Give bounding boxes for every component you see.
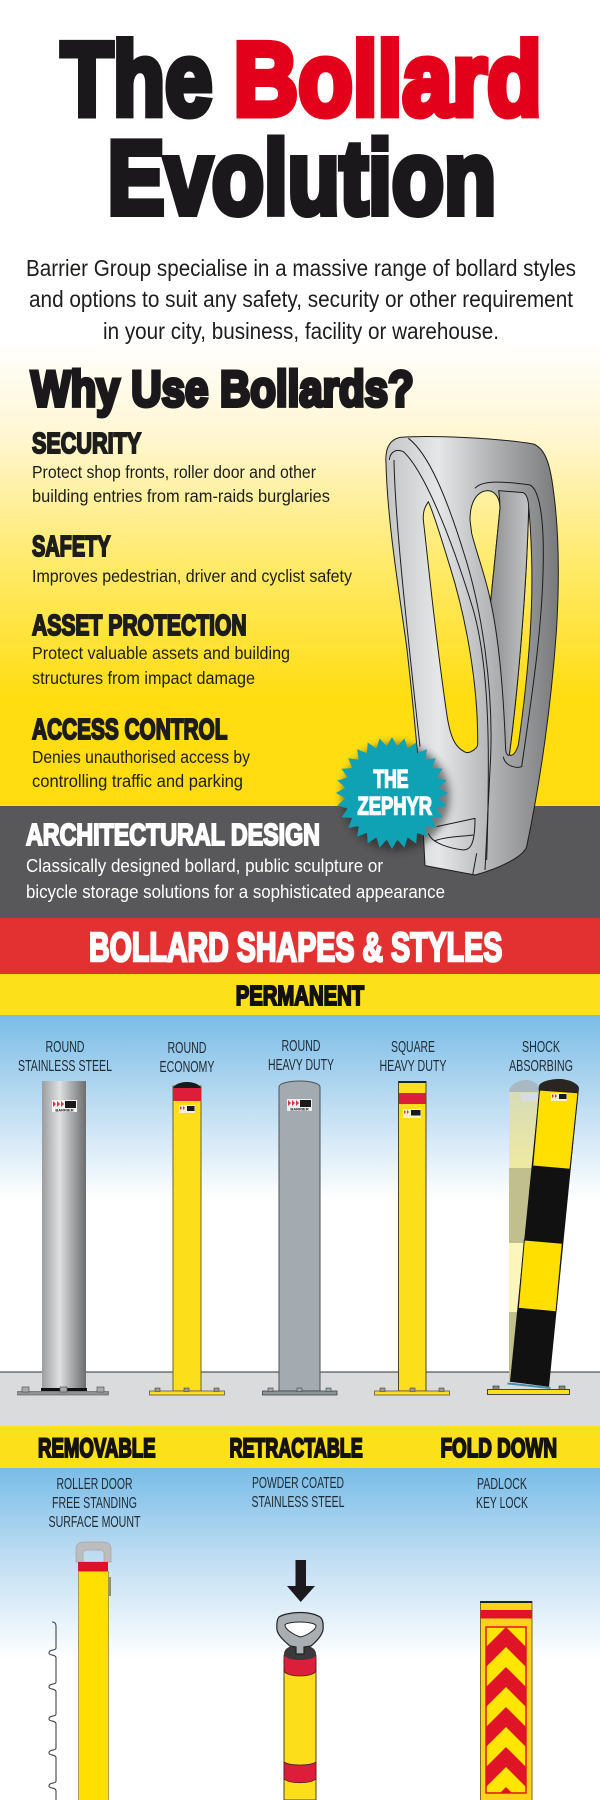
reason: security: SECURITY (32, 428, 141, 460)
labels: permanent types: STAINLESS STEEL (18, 1058, 112, 1075)
bollard: round heavy duty (262, 1081, 337, 1395)
band: permanent heading: PERMANENT (236, 981, 364, 1012)
labels: lower bollard options: ROLLER DOOR (56, 1476, 132, 1493)
reason: security: building entries from ram-raids burglaries (32, 486, 330, 506)
reason: security: Protect shop fronts, roller door and other (32, 462, 316, 482)
bollard: fold down with chevrons (480, 1601, 532, 1800)
background: white to yellow gradient (0, 0, 600, 806)
badge: the zephyr starburst: THE (374, 764, 408, 793)
bollard: round economy (150, 1082, 224, 1395)
reason: safety (32, 530, 352, 586)
intro text (26, 255, 576, 344)
bollard: shock absorbing, tilted with ghost upright position (488, 1079, 579, 1394)
panel: architectural design band (0, 806, 600, 918)
bollard: round stainless steel (18, 1081, 108, 1395)
bollard: retractable with key handle (277, 1612, 323, 1800)
bollard: square heavy duty (374, 1081, 450, 1395)
reason: access control (32, 714, 250, 791)
reason: access control: Denies unauthorised access by (32, 747, 250, 767)
band: permanent heading (0, 974, 600, 1015)
labels: permanent types (18, 1038, 573, 1076)
bollard: round stainless steel: BARRIER (55, 1108, 74, 1112)
band: removable, retractable, fold down headings (0, 1426, 600, 1468)
labels: permanent types: HEAVY DUTY (380, 1058, 446, 1075)
labels: lower bollard options: PADLOCK (477, 1476, 527, 1493)
intro text: in your city, business, facility or warehouse. (103, 318, 499, 344)
labels: lower bollard options: KEY LOCK (476, 1495, 528, 1512)
band: removable, retractable, fold down headings: RETRACTABLE (230, 1432, 363, 1463)
reason: asset protection: Protect valuable assets and building (32, 643, 290, 663)
labels: lower bollard options: FREE STANDING (52, 1495, 137, 1512)
labels: lower bollard options: SURFACE MOUNT (48, 1514, 141, 1531)
bollard: round heavy duty: BARRIER (290, 1106, 309, 1112)
labels: permanent types: ROUND (46, 1039, 84, 1056)
reason: safety: SAFETY (32, 530, 111, 563)
title: The (61, 22, 212, 138)
reason: asset protection: structures from impact damage (32, 668, 255, 688)
reason: asset protection (32, 610, 290, 688)
heading: why use bollards: Why Use Bollards? (31, 361, 414, 417)
arrow: retract downwards (287, 1560, 315, 1602)
architectural design text (26, 817, 445, 902)
reason: safety: Improves pedestrian, driver and cyclist safety (32, 566, 352, 586)
banner: bollard shapes and styles: BOLLARD SHAPES & STYLES (89, 925, 502, 970)
illustration: the zephyr sculptural bollard (386, 437, 558, 875)
band: removable, retractable, fold down headings: REMOVABLE (38, 1433, 156, 1463)
badge: the zephyr starburst: ZEPHYR (358, 792, 432, 820)
architectural design text: bicycle storage solutions for a sophisticated appearance (26, 881, 445, 902)
reason: access control: controlling traffic and parking (32, 771, 243, 791)
labels: lower bollard options: STAINLESS STEEL (252, 1494, 345, 1511)
architectural design text: ARCHITECTURAL DESIGN (26, 817, 320, 852)
title: Evolution (108, 121, 496, 236)
labels: lower bollard options (48, 1475, 528, 1531)
labels: permanent types: ABSORBING (509, 1058, 573, 1075)
band: removable, retractable, fold down headings: FOLD DOWN (440, 1433, 557, 1463)
bollard: removable with handle (76, 1542, 111, 1800)
title: Bollard (234, 21, 542, 138)
title (61, 21, 542, 236)
panel: lower sky backdrop (0, 1468, 600, 1800)
reason: security (32, 428, 330, 506)
panel: permanent sky backdrop (0, 1015, 600, 1372)
labels: permanent types: ROUND (282, 1038, 320, 1055)
labels: permanent types: SHOCK (522, 1039, 560, 1056)
labels: permanent types: ROUND (168, 1040, 206, 1057)
labels: permanent types: SQUARE (391, 1039, 435, 1056)
banner: bollard shapes and styles (0, 918, 600, 974)
badge: the zephyr starburst (328, 729, 456, 857)
reason: asset protection: ASSET PROTECTION (32, 610, 247, 642)
roller door profile line (49, 1622, 56, 1800)
ground strip (0, 1372, 600, 1426)
labels: permanent types: ECONOMY (160, 1059, 214, 1076)
labels: permanent types: HEAVY DUTY (268, 1057, 334, 1074)
reason: access control: ACCESS CONTROL (32, 714, 227, 746)
architectural design text: Classically designed bollard, public sculpture or (26, 855, 383, 876)
labels: lower bollard options: POWDER COATED (252, 1475, 344, 1492)
